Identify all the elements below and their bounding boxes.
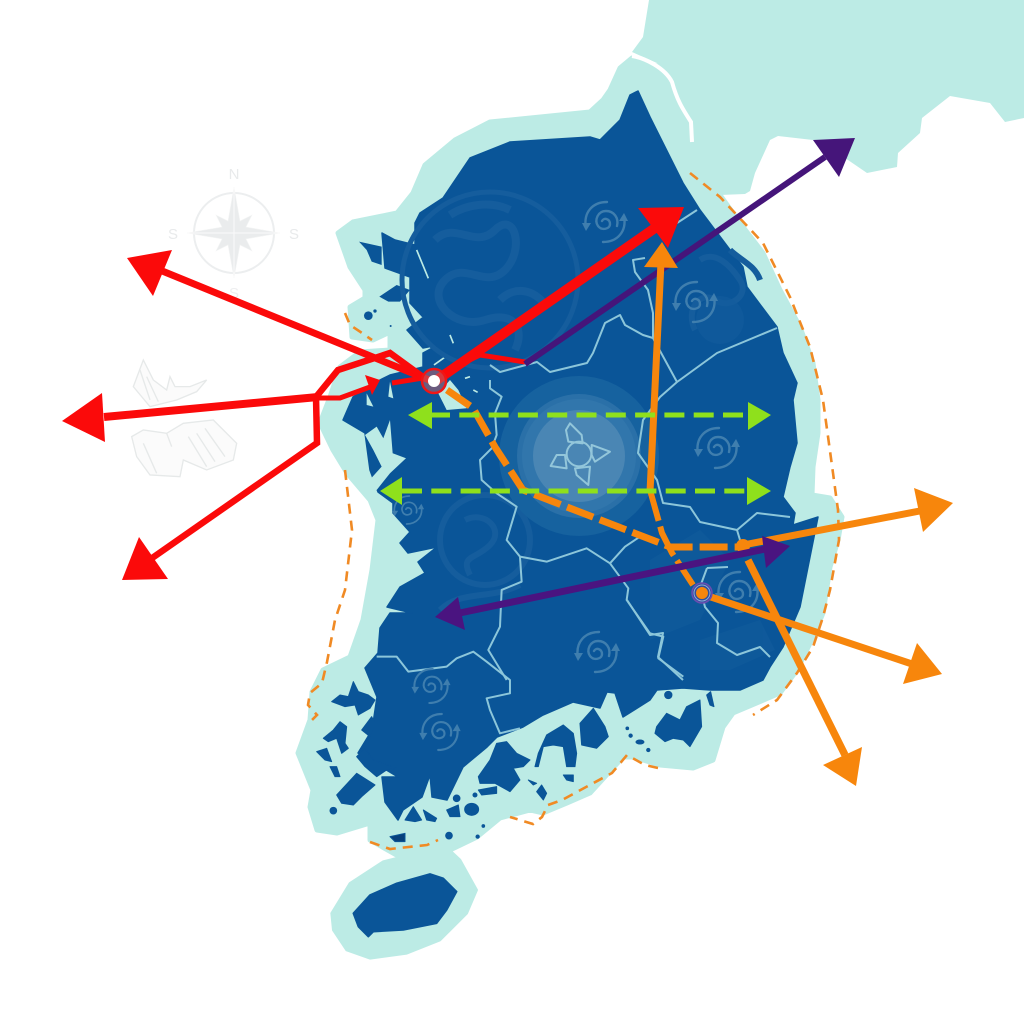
neighbouring landmass bbox=[632, 0, 1024, 195]
dashed sea boundary bbox=[308, 173, 839, 849]
red arrows bbox=[62, 207, 684, 580]
faint compass rose: S bbox=[168, 226, 178, 243]
Jeju island bbox=[332, 851, 477, 958]
orange arrows bbox=[447, 242, 953, 786]
faint compass rose: N bbox=[229, 166, 239, 183]
central glow bbox=[499, 376, 659, 536]
southern islands bbox=[317, 682, 714, 842]
faint crane illustration bbox=[132, 360, 237, 477]
Seoul marker bbox=[422, 369, 446, 393]
coastline white line bbox=[632, 56, 692, 142]
purple arrow east-west bbox=[435, 536, 790, 630]
north-west islands and inlets bbox=[359, 242, 478, 490]
Busan marker bbox=[692, 583, 712, 603]
faint spiral motifs bbox=[392, 202, 761, 750]
faint south-east patches bbox=[650, 296, 775, 670]
faint compass rose: S bbox=[229, 285, 239, 302]
central emblem bbox=[551, 423, 610, 485]
faint compass rose: S bbox=[289, 226, 299, 243]
purple arrow north-east bbox=[525, 138, 855, 364]
halo around mainland bbox=[298, 58, 842, 857]
faint regional patterns bbox=[402, 192, 760, 610]
mainland bbox=[343, 91, 818, 820]
faint compass rose bbox=[168, 166, 299, 302]
regional boundaries bbox=[480, 380, 683, 680]
green east-west arrows bbox=[380, 402, 771, 505]
